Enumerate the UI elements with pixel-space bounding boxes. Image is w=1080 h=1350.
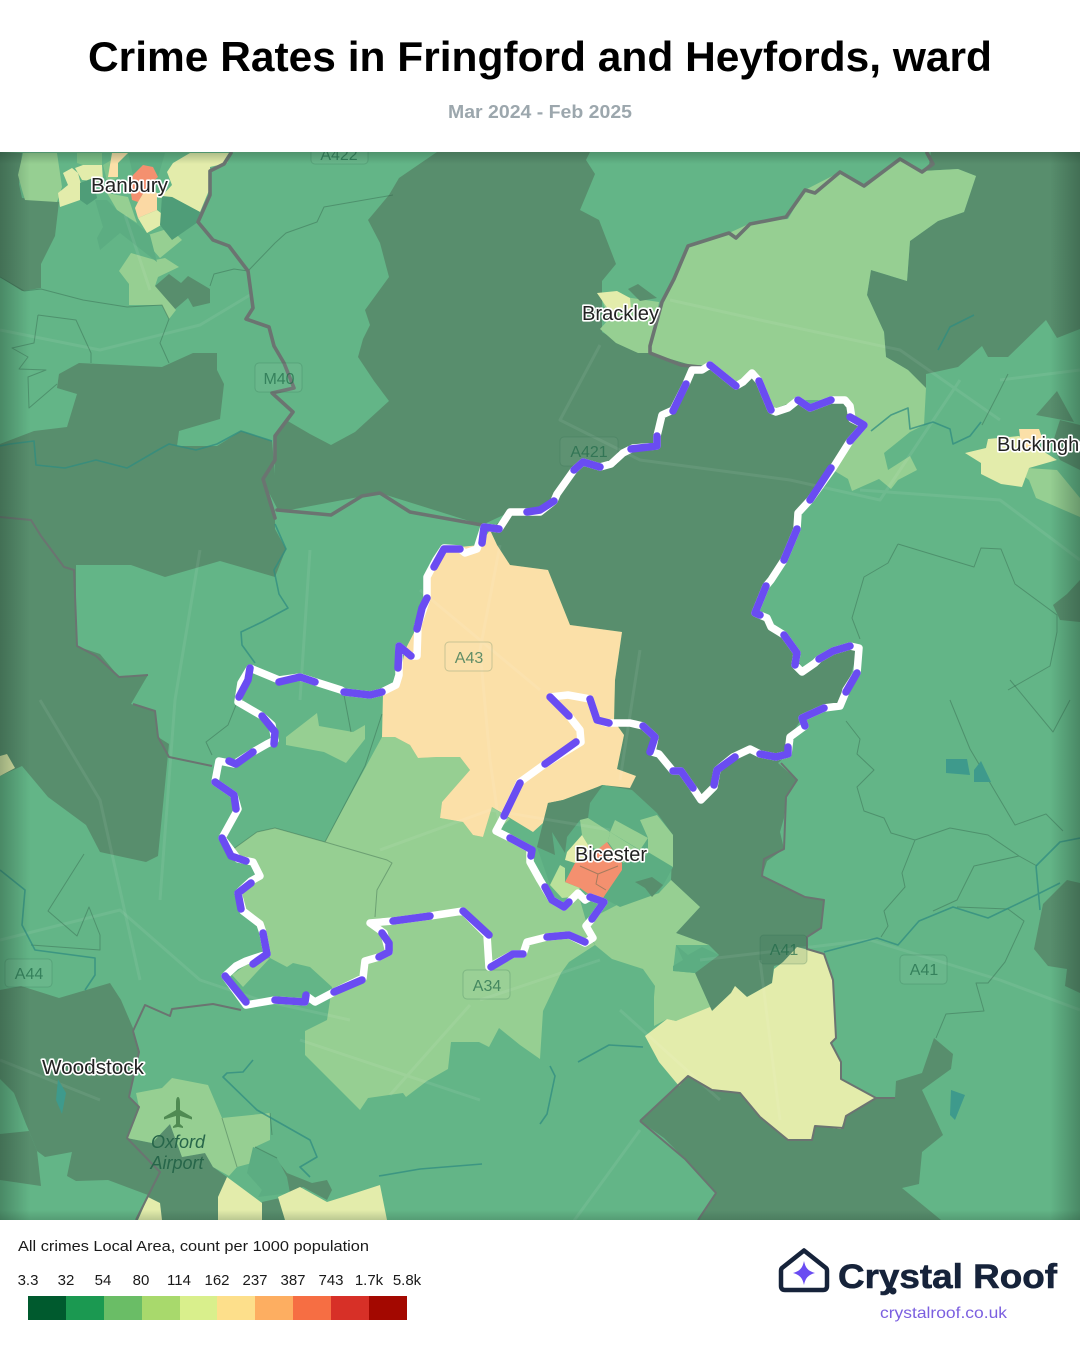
badge: A44: A44 [15,966,43,983]
badge: A41 east: A41 [910,962,938,979]
icon: airport plane [164,1097,192,1128]
badge: A422: A422 [320,147,358,164]
legend scale labels: 3.3 [18,1272,38,1289]
mid green patch in south-east light area [673,950,717,973]
light green moderate-crime areas [0,153,1080,1176]
label: Woodstock: Woodstock [42,1056,145,1079]
label: Banbury: Banbury [91,174,169,197]
badge: A43: A43 [455,650,483,667]
badge: A421 [560,437,618,466]
badge: A34: A34 [473,978,501,995]
label: Oxford Airport: Airport [149,1153,205,1173]
vignette [0,152,1080,1220]
label: Oxford Airport: Oxford [151,1132,206,1152]
road badges [5,134,947,999]
badge: A41 centre: A41 [770,942,798,959]
badge: A34 [463,970,510,999]
ward outline white [215,365,864,1005]
title: Crime Rates in Fringford and Heyfords, ward [88,33,992,80]
Bicester neighbourhoods [537,785,673,907]
legend scale labels: 237 [242,1272,268,1289]
yellow area south-east [645,947,876,1140]
legend scale labels: 5.8k [393,1272,422,1289]
logo wordmark: Crystal Roof [838,1258,1058,1296]
legend colour bar [28,1296,407,1320]
badge: A422 [310,152,368,164]
county borders [0,153,933,1220]
legend scale labels: 80 [133,1272,149,1289]
label: Brackley: Brackley [582,302,660,325]
label: Bicester: Bicester [575,843,647,866]
legend scale labels: 743 [318,1272,344,1289]
badge: M40 [255,363,302,392]
mid-dark Banbury suburbs [97,206,157,262]
Brackley and Buckingham neighbourhoods [597,284,1057,487]
rivers [0,315,1080,1177]
subtitle: date range: Mar 2024 - Feb 2025 [448,101,632,122]
ward outline purple dashes [215,365,864,1002]
Oxford fringe yellow areas [0,754,387,1220]
thin boundaries [0,195,1070,1167]
badge: A44 [5,959,52,987]
badge: A41 centre [760,935,807,964]
legend scale labels: 32 [58,1272,74,1289]
legend scale labels: 1.7k [355,1272,384,1289]
dark low-crime areas [0,152,1080,1220]
badge: A421: A421 [570,444,608,461]
legend scale labels: 387 [280,1272,306,1289]
lakes [56,759,991,1120]
legend scale labels: 162 [204,1272,230,1289]
legend title: All crimes Local Area, count per 1000 population [18,1238,369,1255]
legend [18,1238,422,1320]
icon: house with star [781,1250,827,1290]
map labels [42,174,1080,1173]
faint roads [0,215,1080,1240]
legend scale labels: 54 [95,1272,111,1289]
peach high-crime area [382,530,636,837]
badge: A43 [445,642,492,671]
mid-dark Oxford suburbs [247,1147,290,1197]
legend scale labels [18,1272,422,1289]
badge: M40: M40 [263,371,295,388]
Banbury neighbourhoods [58,153,232,240]
label: Oxford Airport [149,1132,206,1173]
ward boundary: Fringford and Heyfords [215,365,864,1005]
badge: A41 east [900,955,947,984]
logo: Crystal Roof [781,1250,1058,1322]
website link: crystalroof.co.uk [880,1305,1008,1322]
legend scale labels: 114 [167,1272,191,1289]
